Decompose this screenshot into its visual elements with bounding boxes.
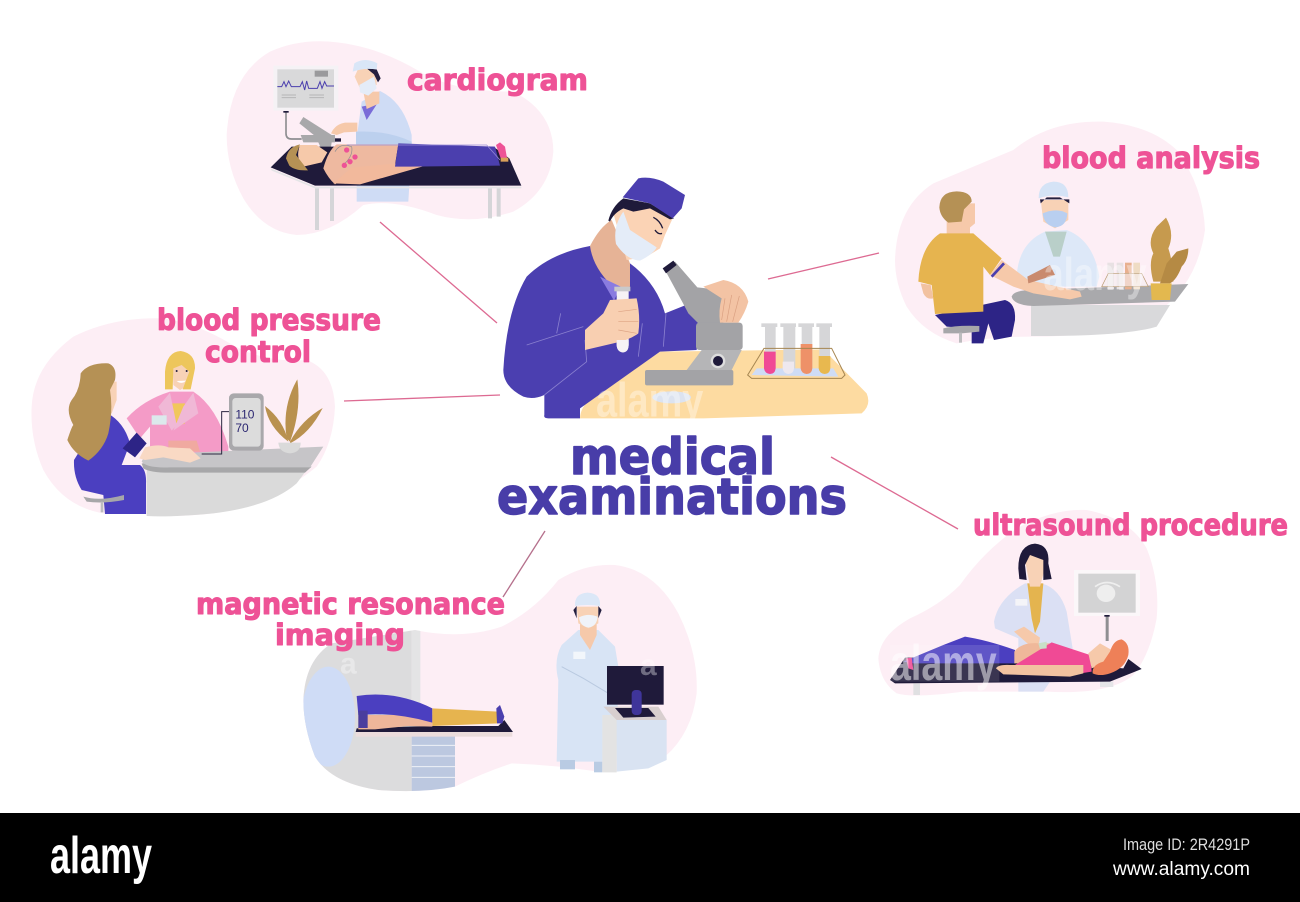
ultrasound screen: [1074, 570, 1140, 641]
main title: [497, 428, 847, 526]
hand on microscope: [703, 280, 748, 323]
panel: MRI scene: [295, 565, 697, 797]
watermark: alamy: [1043, 248, 1147, 300]
monitor: 110/70: [202, 393, 264, 454]
computer station: [602, 666, 667, 772]
watermark overlay: alamy: [890, 635, 997, 691]
connector: blood analysis: [768, 253, 879, 279]
label: blood pressure control: blood pressure: [157, 303, 381, 337]
patient: [918, 191, 1082, 343]
label: cardiogram: cardiogram: [407, 63, 588, 97]
patient: [67, 363, 201, 514]
blob background: [227, 41, 553, 235]
footer bar: [0, 813, 1300, 902]
panel: ultrasound scene: [878, 510, 1157, 695]
connector: blood pressure: [344, 395, 500, 401]
test tube rack: [748, 323, 845, 378]
connector: cardiogram: [380, 222, 497, 323]
microscope: [645, 261, 743, 385]
probe arm: [299, 117, 341, 153]
MRI machine: [304, 630, 455, 791]
plant: [1151, 218, 1188, 300]
desk: [1012, 284, 1188, 336]
watermark glyphs: a: [640, 649, 657, 682]
blob background: [895, 122, 1205, 343]
image id: Image ID: 2R4291P: [1123, 835, 1250, 854]
doctor: [331, 60, 412, 202]
blob background: [878, 510, 1157, 695]
monitor: 110/70: 70: [235, 421, 249, 435]
desk: [142, 447, 323, 516]
plant: [265, 379, 323, 453]
label: magnetic resonance imaging: magnetic resonance: [196, 587, 505, 621]
central illustration: scientist at microscope: [503, 178, 868, 428]
label: blood analysis: blood analysis: [1042, 141, 1260, 175]
main title: medical: [570, 428, 775, 486]
alamy logo: alamy: [50, 827, 152, 885]
couch: [890, 658, 1142, 695]
panel: blood pressure scene: [31, 318, 335, 516]
nurse: [127, 351, 228, 453]
ECG monitor: [273, 66, 338, 139]
monitor: 110/70: 110: [235, 407, 255, 421]
watermark glyphs: [340, 647, 657, 682]
blob background: [31, 318, 335, 516]
doctor: [556, 593, 618, 772]
patient: [286, 142, 508, 184]
blob background: [303, 565, 697, 791]
test tube rack: [1102, 263, 1148, 289]
patient: [903, 637, 1129, 677]
panel: cardiogram scene: [227, 41, 553, 235]
patient on table: [356, 695, 513, 737]
lab table: [580, 349, 868, 418]
test tube in hand: [585, 287, 639, 352]
couch: [271, 147, 521, 230]
connector: MRI: [503, 531, 545, 597]
label: blood pressure control: [157, 303, 381, 369]
label: blood pressure control: control: [205, 335, 311, 369]
label: magnetic resonance imaging: imaging: [275, 618, 405, 652]
panel: blood analysis scene: [895, 122, 1205, 343]
petri dish: [652, 391, 691, 403]
doctor: [1017, 182, 1099, 287]
connector: ultrasound: [831, 457, 958, 529]
label: magnetic resonance imaging: [196, 587, 505, 652]
watermark: alamy: [596, 374, 703, 428]
sonographer: [994, 544, 1073, 692]
watermark glyphs: a: [340, 647, 357, 680]
scientist: [503, 178, 698, 418]
main title: examinations: [497, 468, 847, 526]
site url: www.alamy.com: [1112, 859, 1250, 880]
